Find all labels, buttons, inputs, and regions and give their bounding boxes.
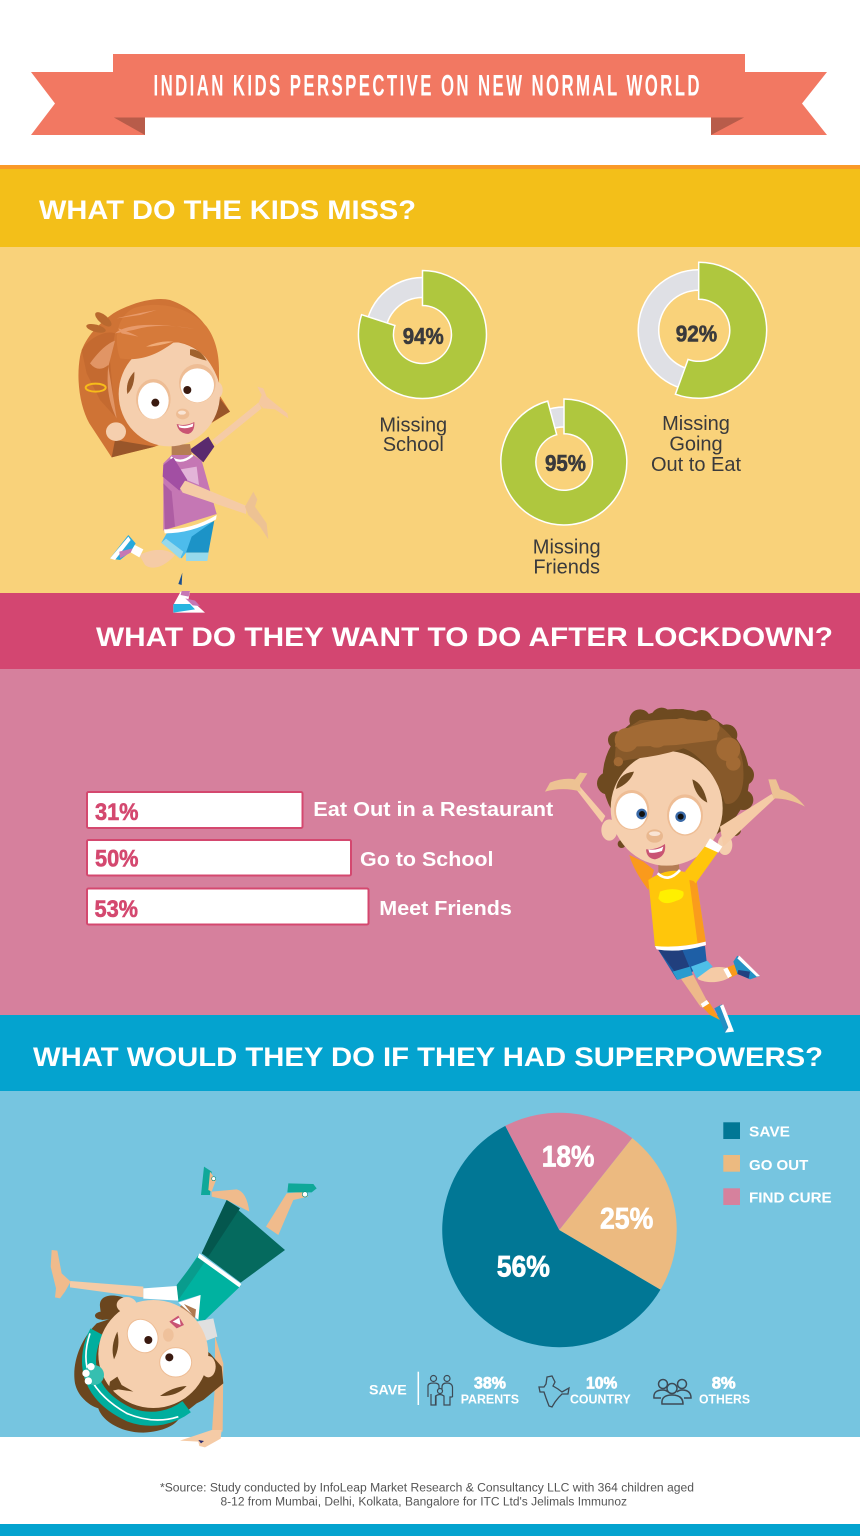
legend	[723, 1122, 832, 1206]
bar: go to school 50%	[87, 840, 494, 876]
value: 94%	[403, 323, 444, 349]
legend: GO OUT	[749, 1157, 808, 1174]
heading: after lockdown: WHAT DO THEY WANT TO DO AFTER LOCKDOWN?	[96, 622, 833, 652]
bar: meet friends 53%	[87, 888, 512, 924]
bar: go to school 50%: Go to School	[360, 848, 494, 871]
label: School	[383, 434, 444, 456]
label: Missing	[379, 415, 447, 437]
footer bar	[0, 1524, 860, 1536]
icon: people group	[654, 1380, 691, 1404]
pie chart	[442, 1113, 677, 1347]
icon: India map	[539, 1376, 569, 1407]
title text: INDIAN KIDS PERSPECTIVE ON NEW NORMAL WORLD	[154, 70, 699, 103]
donut: missing school 94%	[358, 270, 486, 456]
hair clip	[86, 384, 106, 392]
section: after lockdown	[0, 593, 860, 1015]
orange stripe	[0, 165, 860, 169]
bar: go to school 50%: 50%	[95, 846, 138, 872]
character: jumping girl	[78, 299, 288, 613]
save breakdown row	[369, 1372, 750, 1407]
icon: family	[428, 1376, 452, 1405]
bar: eat out 31%: 31%	[95, 799, 138, 826]
label: Going	[669, 434, 723, 456]
character: jumping boy	[545, 708, 805, 1033]
bar: meet friends 53%: Meet Friends	[379, 897, 512, 920]
label: Out to Eat	[651, 454, 741, 476]
save breakdown row: SAVE	[369, 1382, 407, 1398]
section: superpowers	[0, 1015, 860, 1437]
heading: superpowers: WHAT WOULD THEY DO IF THEY HAD SUPERPOWERS?	[33, 1042, 823, 1072]
bar: eat out 31%: Eat Out in a Restaurant	[313, 798, 553, 821]
bar: eat out 31%	[87, 792, 553, 828]
section: what do the kids miss	[0, 169, 860, 593]
legend: SAVE	[749, 1124, 790, 1140]
save breakdown row: 8%	[712, 1373, 736, 1392]
headband	[89, 1332, 187, 1419]
value: 18%: 18%	[542, 1141, 594, 1174]
source note: *Source: Study conducted by InfoLeap Market Research & Consultancy LLC with 364 children aged	[160, 1482, 694, 1494]
character: upside down kid doing handstand	[51, 1167, 317, 1447]
value: 92%	[676, 321, 717, 347]
bow flower	[82, 1363, 104, 1385]
label: Friends	[533, 556, 600, 578]
legend: FIND CURE	[749, 1189, 832, 1206]
save breakdown row: 10%	[586, 1373, 617, 1392]
value: 25%: 25%	[600, 1202, 653, 1235]
save breakdown row: PARENTS	[461, 1392, 519, 1406]
title banner	[31, 54, 827, 135]
donut: missing going out to eat 92%	[638, 262, 767, 476]
bar: meet friends 53%: 53%	[94, 896, 138, 923]
save breakdown row: COUNTRY	[570, 1392, 631, 1406]
source note	[160, 1482, 694, 1508]
source note: 8-12 from Mumbai, Delhi, Kolkata, Bangalore for ITC Ltd's Jelimals Immunoz	[220, 1496, 627, 1508]
save breakdown row: OTHERS	[699, 1392, 750, 1406]
save breakdown row: 38%	[474, 1373, 506, 1392]
label: Missing	[533, 536, 601, 558]
donut: missing friends 95%	[501, 399, 627, 578]
curly fringe	[614, 720, 743, 804]
value: 95%	[545, 450, 586, 476]
value: 56%: 56%	[497, 1251, 550, 1284]
label: Missing	[662, 413, 730, 435]
heading: kids miss: WHAT DO THE KIDS MISS?	[39, 195, 416, 225]
